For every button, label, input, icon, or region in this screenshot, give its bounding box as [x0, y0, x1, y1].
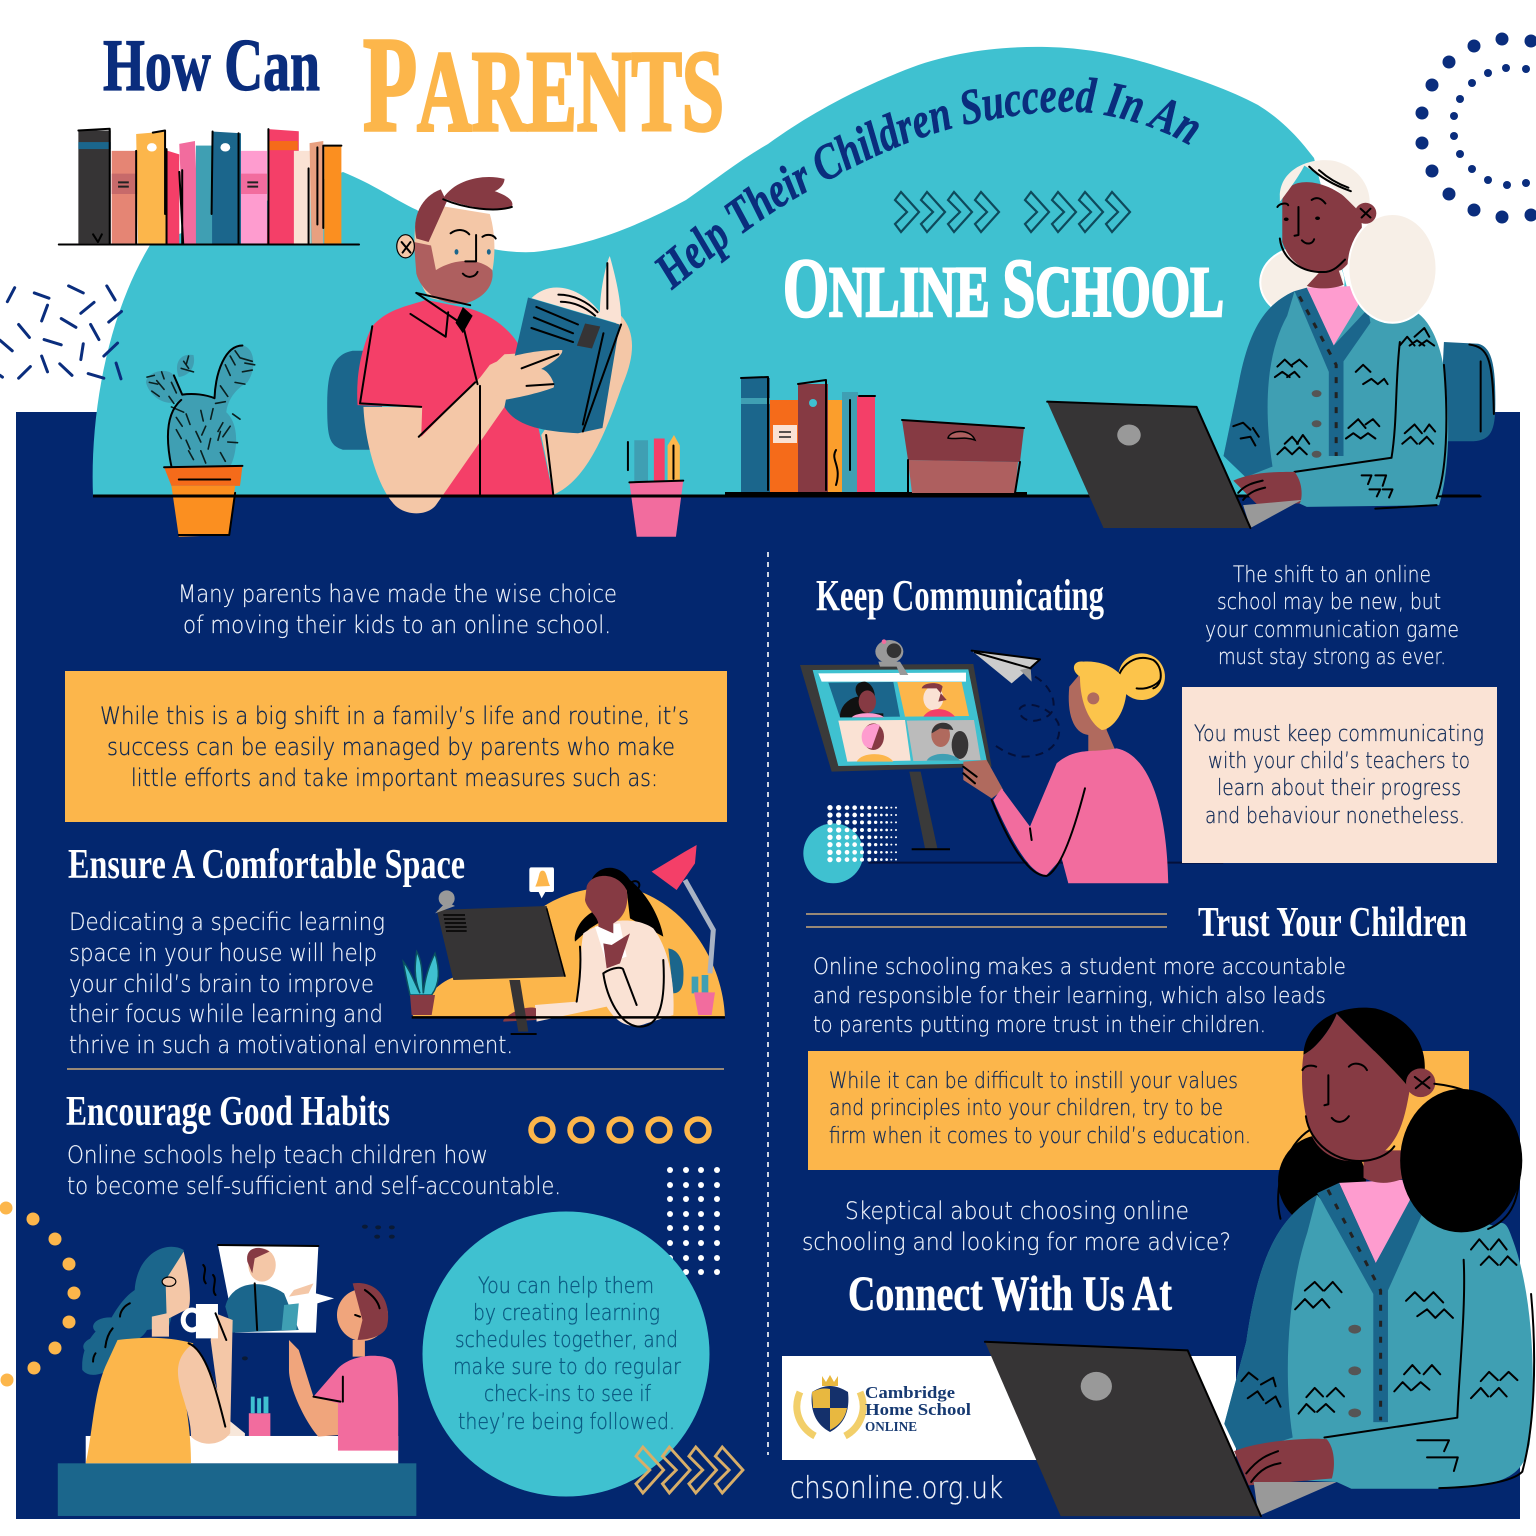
icon: yellow dotted arc [0, 1202, 80, 1386]
text: good habits body [67, 1141, 561, 1200]
desk line [93, 494, 1480, 498]
logo: Cambridge Home School Online: Home School [865, 1400, 971, 1419]
icon: navy dash scatter [0, 286, 121, 379]
panel: teal circle callout [422, 1212, 710, 1496]
heading: Ensure A Comfortable Space: Ensure A Comfortable Space [68, 842, 465, 888]
dashed column divider [767, 552, 769, 1455]
icon: pencil cup [628, 435, 683, 537]
text: trust body [813, 955, 1346, 1038]
title: How Can: How Can [103, 25, 320, 107]
teal header wave shape [93, 47, 1400, 496]
intro text: of moving their kids to an online school. [183, 611, 611, 639]
title: Parents: PARENTS [363, 10, 724, 160]
intro text: Many parents have made the wise choice [178, 580, 617, 608]
panel: yellow values callout: While it can be difficult to instill your values [829, 1069, 1238, 1094]
text: good habits body: Online schools help teach children how [67, 1141, 488, 1169]
panel: teal circle callout: check-ins to see if [484, 1382, 651, 1407]
text: comfortable space body: Dedicating a specific learning [69, 908, 385, 936]
icon: gold chevrons [636, 1447, 743, 1493]
icon: cactus in pot [146, 346, 255, 537]
icon: five yellow rings [531, 1119, 709, 1141]
illustration: girl at desk [403, 845, 725, 1034]
illustration: woman on video call [800, 639, 1223, 883]
text: communication intro: The shift to an online [1233, 563, 1431, 588]
text: comfortable space body [69, 908, 513, 1059]
heading: Encourage Good Habits: Encourage Good Habits [66, 1089, 390, 1135]
panel: yellow callout: little efforts and take important measures such as: [131, 764, 658, 792]
illustration: mother and child on video lesson [58, 1225, 416, 1516]
text: comfortable space body: thrive in such a motivational environment. [69, 1031, 513, 1059]
text: trust body: to parents putting more trust in their children. [813, 1013, 1266, 1038]
panel: yellow values callout: firm when it comes to your child’s education. [829, 1124, 1251, 1149]
panel: yellow callout: success can be easily managed by parents who make [107, 733, 675, 761]
text: communication intro: your communication game [1205, 618, 1459, 643]
title: Online School: ONLINE SCHOOL [783, 242, 1224, 335]
illustration: woman with black hair at laptop [985, 1008, 1534, 1516]
text: website url: chsonline.org.uk [790, 1471, 1003, 1506]
panel: cream callout: with your child’s teachers to [1208, 749, 1470, 774]
text: comfortable space body: your child’s brain to improve [69, 970, 374, 998]
text: skeptical prompt: Skeptical about choosing online [845, 1197, 1189, 1225]
heading: Keep Communicating: Keep Communicating [816, 571, 1104, 620]
icon: double chevrons [895, 192, 1130, 232]
text: trust body: Online schooling makes a student more accountable [813, 955, 1346, 980]
text: communication intro [1205, 563, 1459, 670]
text: comfortable space body: space in your house will help [69, 939, 377, 967]
panel: cream callout [1182, 687, 1497, 863]
text: communication intro: school may be new, but [1217, 590, 1441, 615]
panel: teal circle callout: You can help them [478, 1274, 654, 1299]
illustration: man reading a book [327, 177, 632, 513]
panel: yellow callout: While this is a big shift in a family’s life and routine, it’s [100, 702, 689, 730]
icon: desk books [725, 377, 1027, 494]
panel: teal circle callout: by creating learning [473, 1301, 660, 1326]
icon: bookshelf with books [59, 129, 359, 245]
heading: Connect With Us At: Connect With Us At [848, 1265, 1172, 1321]
logo: Cambridge Home School Online [782, 1356, 1236, 1460]
text: skeptical prompt: schooling and looking for more advice? [802, 1228, 1231, 1256]
icon: white dot grid [667, 1167, 720, 1275]
panel: cream callout: and behaviour nonetheless. [1205, 804, 1465, 829]
navy background panel [16, 412, 1520, 1519]
intro text [178, 580, 617, 639]
icon: storage box [902, 420, 1024, 493]
panel: teal circle callout: schedules together, and [455, 1328, 678, 1353]
panel: teal circle callout: make sure to do regular [453, 1355, 682, 1380]
panel: teal circle callout: they’re being followed. [458, 1410, 675, 1435]
panel: yellow callout [65, 671, 727, 822]
illustration: woman with white hair at laptop [1047, 160, 1495, 528]
panel: yellow values callout: and principles into your children, try to be [829, 1096, 1223, 1121]
panel: cream callout: You must keep communicating [1194, 722, 1484, 747]
logo: Cambridge Home School Online: Cambridge [865, 1383, 955, 1402]
panel: yellow values callout [808, 1051, 1469, 1170]
title: curved subtitle: Help Their Children Succeed In An [654, 77, 1199, 291]
text: comfortable space body: their focus while learning and [69, 1000, 383, 1028]
text: communication intro: must stay strong as ever. [1218, 645, 1446, 670]
text: good habits body: to become self-sufficient and self-accountable. [67, 1172, 561, 1200]
panel: cream callout: learn about their progress [1217, 776, 1461, 801]
logo: Cambridge Home School Online: ONLINE [865, 1420, 917, 1435]
icon: navy dotted arcs top right [1416, 32, 1536, 224]
text: skeptical prompt [802, 1197, 1231, 1256]
text: trust body: and responsible for their learning, which also leads [813, 984, 1326, 1009]
